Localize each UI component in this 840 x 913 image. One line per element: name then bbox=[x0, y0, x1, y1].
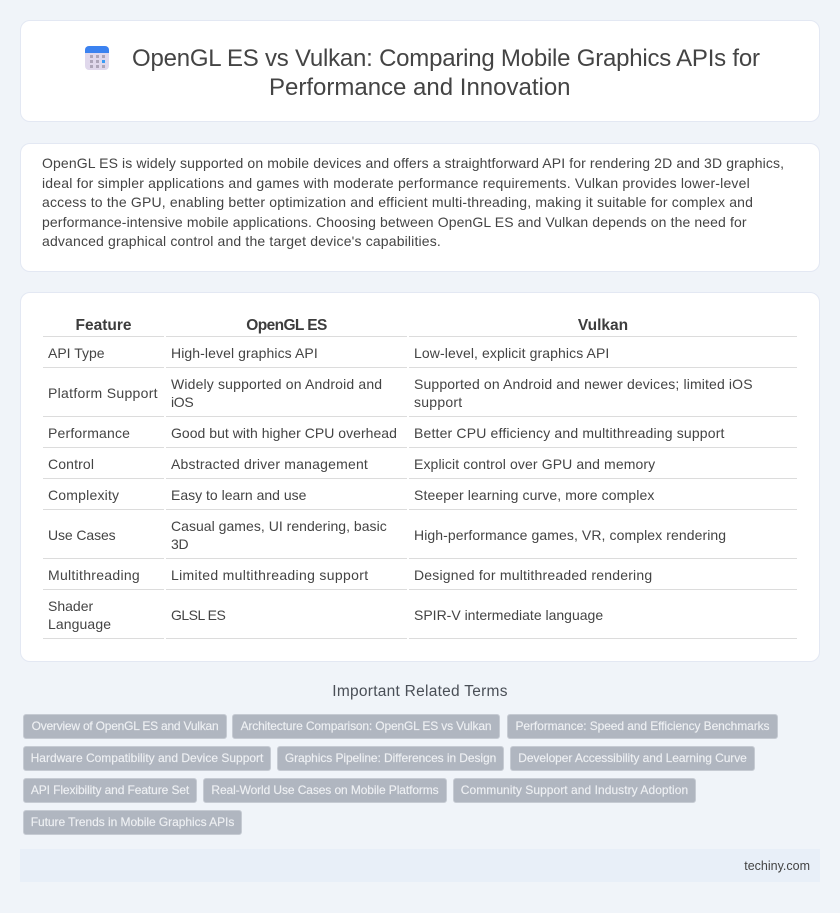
table header: Vulkan: Vulkan bbox=[578, 317, 628, 334]
tag: Overview of OpenGL ES and Vulkan bbox=[32, 719, 218, 733]
row: use cases: High-performance games, VR, complex rendering bbox=[414, 527, 726, 543]
row: shader language: Shader bbox=[48, 598, 93, 614]
description card bbox=[20, 143, 820, 272]
footer bar bbox=[20, 849, 820, 882]
description text: access to the GPU, enabling better optimization and efficient multi-threading, making it suitable for complex and bbox=[42, 194, 753, 210]
tag: Developer Accessibility and Learning Curve bbox=[518, 751, 747, 765]
row: shader language: GLSL ES bbox=[171, 607, 225, 623]
row: API type: Low-level, explicit graphics API bbox=[414, 345, 609, 361]
tag bbox=[23, 810, 242, 835]
row: platform support: support bbox=[414, 394, 462, 410]
row: control: Control bbox=[48, 456, 94, 472]
description text bbox=[42, 155, 784, 249]
row: control bbox=[48, 456, 656, 472]
related terms tags bbox=[23, 714, 778, 835]
description text: OpenGL ES is widely supported on mobile devices and offers a straightforward API for rendering 2D and 3D graphics, bbox=[42, 155, 784, 171]
tag: Architecture Comparison: OpenGL ES vs Vulkan bbox=[241, 719, 491, 733]
row: control: Explicit control over GPU and memory bbox=[414, 456, 655, 472]
row: complexity: Easy to learn and use bbox=[171, 487, 306, 503]
tag bbox=[232, 714, 500, 739]
tag bbox=[23, 778, 197, 803]
row: use cases: Casual games, UI rendering, basic bbox=[171, 518, 387, 534]
row: multithreading: Multithreading bbox=[48, 567, 140, 583]
row: platform support bbox=[48, 376, 753, 410]
row: performance: Good but with higher CPU overhead bbox=[171, 425, 397, 441]
row: use cases: Use Cases bbox=[48, 527, 116, 543]
row: shader language bbox=[48, 598, 603, 632]
row: platform support: Platform Support bbox=[48, 385, 158, 401]
row: multithreading bbox=[48, 567, 652, 583]
description text: ideal for simpler applications and games with moderate performance requirements. Vulkan provides lower-level bbox=[42, 175, 750, 191]
tag bbox=[277, 746, 504, 771]
row: shader language: SPIR-V intermediate language bbox=[414, 607, 603, 623]
row: control: Abstracted driver management bbox=[171, 456, 368, 472]
tag: API Flexibility and Feature Set bbox=[31, 783, 189, 797]
description text: advanced graphical control and the target device's capabilities. bbox=[42, 233, 441, 249]
row: performance: Better CPU efficiency and multithreading support bbox=[414, 425, 725, 441]
icon: calendar bbox=[85, 46, 109, 70]
comparison table card bbox=[20, 292, 820, 662]
row: multithreading: Designed for multithreaded rendering bbox=[414, 567, 652, 583]
row: complexity: Complexity bbox=[48, 487, 119, 503]
title line two: Performance and Innovation bbox=[269, 74, 571, 101]
tag bbox=[23, 714, 227, 739]
tag bbox=[203, 778, 447, 803]
table header: feature: Feature bbox=[76, 317, 132, 334]
tag: Hardware Compatibility and Device Support bbox=[31, 751, 263, 765]
tag bbox=[453, 778, 696, 803]
row: API type: API Type bbox=[48, 345, 105, 361]
row: API type bbox=[48, 345, 609, 361]
row: use cases bbox=[48, 518, 726, 552]
header card bbox=[20, 20, 820, 122]
row: complexity bbox=[48, 487, 655, 503]
table header: OpenGL ES: OpenGL ES bbox=[246, 317, 327, 334]
row: complexity: Steeper learning curve, more complex bbox=[414, 487, 655, 503]
tag: Community Support and Industry Adoption bbox=[461, 783, 688, 797]
tag: Performance: Speed and Efficiency Benchmarks bbox=[516, 719, 769, 733]
related terms heading: Important Related Terms bbox=[332, 683, 508, 700]
tag: Future Trends in Mobile Graphics APIs bbox=[31, 815, 234, 829]
row: platform support: Widely supported on Android and bbox=[171, 376, 382, 392]
row: performance bbox=[48, 425, 725, 441]
row: use cases: 3D bbox=[171, 536, 188, 552]
row: multithreading: Limited multithreading support bbox=[171, 567, 368, 583]
description text: performance-intensive mobile applications. Choosing between OpenGL ES and Vulkan depends on the need for bbox=[42, 214, 747, 230]
tag: Graphics Pipeline: Differences in Design bbox=[285, 751, 496, 765]
row: platform support: iOS bbox=[171, 394, 193, 410]
footer source: techiny.com bbox=[744, 859, 810, 873]
row: platform support: Supported on Android and newer devices; limited iOS bbox=[414, 376, 753, 392]
row: shader language: Language bbox=[48, 616, 111, 632]
row: API type: High-level graphics API bbox=[171, 345, 318, 361]
tag: Real-World Use Cases on Mobile Platforms bbox=[211, 783, 439, 797]
tag bbox=[23, 746, 271, 771]
title: OpenGL ES vs Vulkan: Comparing Mobile Graphics APIs for bbox=[132, 45, 760, 72]
tag bbox=[510, 746, 755, 771]
tag bbox=[507, 714, 778, 739]
row: performance: Performance bbox=[48, 425, 130, 441]
